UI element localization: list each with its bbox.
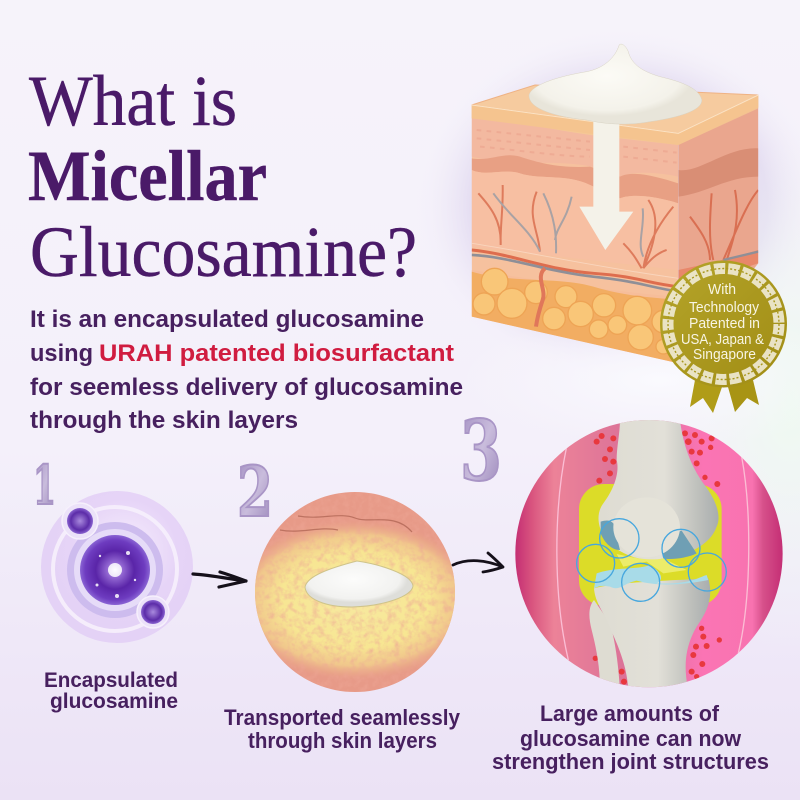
caption: step 3: glucosamine can now <box>520 726 742 751</box>
caption: step 2: Transported seamlessly <box>224 705 461 730</box>
intro text block: URAH patented biosurfactant <box>99 340 454 367</box>
right face of skin block <box>678 96 758 280</box>
caption: step 3 <box>492 701 769 774</box>
seal text: With <box>708 281 736 298</box>
intro text block: through the skin layers <box>30 407 298 434</box>
yellow synovial capsule <box>579 484 722 606</box>
seal ribbons <box>690 380 722 413</box>
intro text block: using <box>30 340 93 367</box>
cream arrow <box>579 117 633 250</box>
icon: encapsulated glucosamine sphere <box>41 491 193 643</box>
caption: step 3: strengthen joint structures <box>492 749 769 774</box>
seal text: Singapore <box>693 346 756 363</box>
intro text block <box>30 306 463 434</box>
caption: step 2 <box>224 705 461 753</box>
intro text block: It is an encapsulated glucosamine <box>30 306 424 333</box>
blue cartilage <box>594 565 708 588</box>
blue cartilage circles <box>577 519 726 601</box>
front face of skin block <box>472 105 678 365</box>
knee joint illustration <box>513 418 785 690</box>
seal text <box>681 281 764 363</box>
step number 2: 2 <box>237 452 273 533</box>
caption: step 1 <box>44 668 178 713</box>
title: Micellar <box>28 136 267 216</box>
gold patent seal <box>660 260 787 413</box>
red blood cells <box>593 430 722 685</box>
title: What is <box>29 61 237 141</box>
step number 1: 1 <box>33 453 56 517</box>
yellow synovial fluid <box>617 554 687 573</box>
top face of skin block <box>472 85 758 133</box>
step number 3: 3 <box>460 402 502 500</box>
skin cross-section illustration <box>472 44 760 367</box>
intro text block: for seemless delivery of glucosamine <box>30 374 463 401</box>
arrow: step 2 to 3 <box>453 553 503 572</box>
tibia <box>594 578 710 690</box>
title: Glucosamine? <box>30 212 417 292</box>
skin with applied cream <box>255 492 455 692</box>
caption: step 3: Large amounts of <box>540 701 720 726</box>
fibula <box>589 600 620 690</box>
caption: step 1: Encapsulated <box>44 668 178 692</box>
seal text: Patented in <box>689 315 760 332</box>
seal text: Technology <box>689 299 759 316</box>
femur <box>599 420 719 560</box>
title <box>28 61 417 292</box>
cream blob <box>305 561 413 607</box>
seal text: USA, Japan & <box>681 331 764 348</box>
caption: step 1: glucosamine <box>50 689 178 713</box>
caption: step 2: through skin layers <box>248 728 437 753</box>
arrow: step 1 to 2 <box>193 572 246 587</box>
cream dollop <box>529 44 702 124</box>
